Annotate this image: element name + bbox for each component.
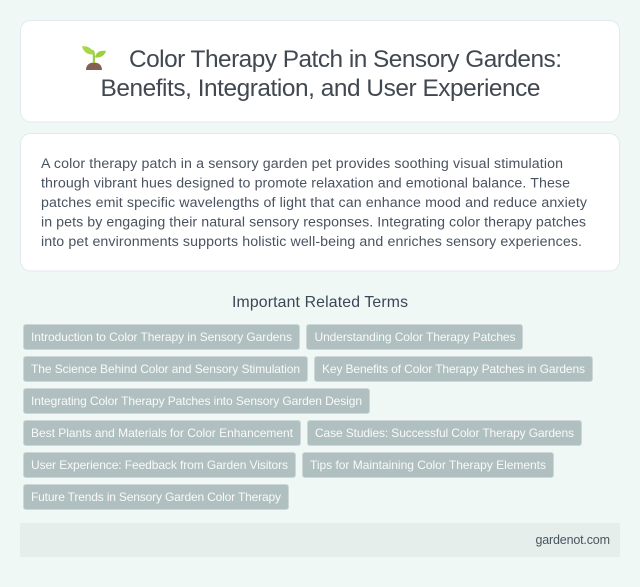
tag: Best Plants and Materials for Color Enhancement bbox=[31, 426, 294, 440]
tag bbox=[24, 484, 288, 510]
panel: description card bbox=[20, 134, 620, 271]
text block: description: through vibrant hues designed to promote relaxation and emotional balance. These bbox=[41, 176, 570, 192]
tag: Introduction to Color Therapy in Sensory Gardens bbox=[31, 330, 292, 344]
tag bbox=[24, 388, 370, 414]
heading: important related terms: Important Related Terms bbox=[232, 294, 408, 311]
title bbox=[100, 46, 562, 102]
text block: description: patches emit specific wavelengths of light that can enhance mood and reduce anxiety bbox=[41, 195, 588, 211]
text block: description bbox=[41, 156, 588, 250]
tag bbox=[24, 324, 300, 350]
text block: description: A color therapy patch in a sensory garden pet provides soothing visual stimulation bbox=[41, 156, 563, 172]
text block: description: in pets by engaging their natural sensory responses. Integrating color therapy patches bbox=[41, 214, 586, 230]
panel: title card bbox=[20, 20, 620, 122]
icon: seedling bbox=[82, 46, 106, 70]
tag bbox=[302, 452, 554, 478]
tag list bbox=[24, 324, 592, 510]
tag: Future Trends in Sensory Garden Color Therapy bbox=[31, 490, 281, 504]
tag: Tips for Maintaining Color Therapy Elements bbox=[310, 458, 546, 472]
title: Color Therapy Patch in Sensory Gardens: bbox=[129, 46, 562, 73]
tag: User Experience: Feedback from Garden Visitors bbox=[31, 458, 288, 472]
tag: Key Benefits of Color Therapy Patches in Gardens bbox=[322, 362, 585, 376]
text block: description: into pet environments supports holistic well-being and enriches sensory experiences. bbox=[41, 234, 582, 250]
tag bbox=[24, 452, 296, 478]
tag bbox=[24, 356, 308, 382]
tag bbox=[308, 420, 582, 446]
tag: Case Studies: Successful Color Therapy Gardens bbox=[315, 426, 574, 440]
title: Benefits, Integration, and User Experience bbox=[100, 75, 540, 102]
footer: gardenot.com bbox=[536, 533, 610, 547]
tag bbox=[306, 324, 522, 350]
tag bbox=[24, 420, 300, 446]
tag: Understanding Color Therapy Patches bbox=[314, 330, 516, 344]
footer bbox=[20, 523, 620, 557]
tag bbox=[314, 356, 592, 382]
tag: Integrating Color Therapy Patches into Sensory Garden Design bbox=[31, 394, 362, 408]
tag: The Science Behind Color and Sensory Stimulation bbox=[31, 362, 300, 376]
